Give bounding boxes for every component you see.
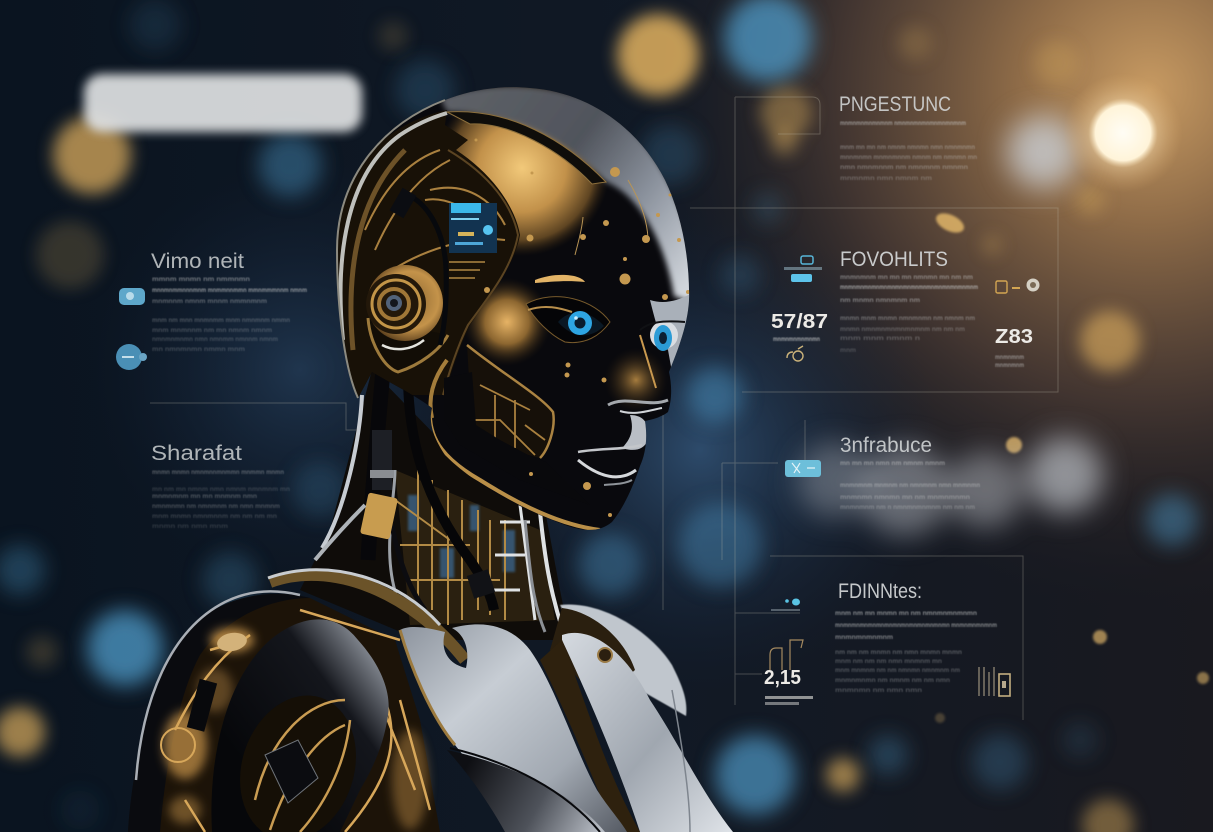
heading: Fovohlits: FOVOHLITS	[840, 248, 948, 271]
ear dial	[366, 265, 443, 349]
text block: FDINNtes body: mnmnmnmn nm nmnm nm nm nmn	[835, 677, 950, 684]
text block: Sharafat body: mnm mnmn nmnmnnm nm nm nm mn	[152, 513, 277, 520]
panel: Sharafat	[151, 442, 290, 530]
icon: cyan badge	[785, 460, 821, 477]
panel: Vimo neit	[116, 250, 307, 370]
bokeh lights: white haze	[797, 116, 1103, 536]
head	[330, 80, 698, 540]
text block: Sharafat body: mn nm mn nmnm nmn nmnm nmnmnm mn	[152, 486, 290, 493]
ear plate outline	[368, 318, 448, 372]
cheek highlight	[468, 282, 546, 362]
text block: Vimo neit body: mnm mnmnnm nm mn nmnm nmnm	[152, 327, 272, 334]
exposed skull machinery	[337, 110, 520, 400]
text block: Vimo neit body: mnm nm mnn mnmnmm mnm nmnmnm nmmn	[152, 317, 290, 324]
statistic: Z83: mnmnmnm	[995, 354, 1024, 361]
heading: Pngestunc: PNGESTUNC	[839, 93, 951, 116]
text block: Pngestunc body	[840, 120, 977, 182]
text block: 3nfrabuce body	[840, 460, 980, 511]
cheek window	[430, 345, 600, 530]
text block: Vimo neit body: mn nmnmnmn nmmn mnm	[152, 346, 245, 353]
text block: Sharafat body: nmnmnmn nm nmnmnm nm nmn mnmnm	[152, 503, 280, 510]
text block: Vimo neit body: mnmnnm nmnm mnnm nmmnmnm	[152, 298, 267, 305]
robot neck	[300, 370, 570, 640]
rib machinery	[540, 640, 640, 832]
statistic: 57/87: 57/87	[771, 311, 828, 333]
text block: 3nfrabuce body: mnmnmnm nm n nmnmnmnmnm nm nm nm	[840, 504, 975, 511]
text block: Sharafat body	[152, 469, 290, 530]
left shoulder mechanism	[128, 591, 440, 832]
statistic: 57/87: mnmnmnmnmnmn	[773, 336, 820, 343]
robot	[128, 80, 733, 832]
bright sun flare	[1063, 73, 1183, 193]
text block: FDINNtes body: mnm nm nm nm nmn mnmnm mn	[835, 658, 942, 665]
text block: Fovohlits body: mnmnmnmnmnmnmnmnmnmnmnmnmnmnmnmnmnm	[840, 284, 978, 291]
chest plate	[400, 624, 627, 832]
icon: gold square and dial	[996, 278, 1040, 293]
statistic: Z83: Z83	[995, 326, 1033, 348]
nose highlight	[609, 353, 663, 407]
text block: Pngestunc body: nmn nmnmnnm nm nmnmnm nmnmn	[840, 164, 968, 171]
heading: 3nfrabuce: 3nfrabuce	[840, 434, 932, 457]
head hair rim	[337, 100, 445, 398]
bokeh lights: small gold sparks	[933, 209, 1209, 723]
text block: FDINNtes body: mnmnmnmnmnm	[835, 634, 893, 641]
top band	[447, 112, 606, 184]
text block: FDINNtes body	[835, 610, 997, 694]
robot collar	[268, 505, 465, 660]
text block: 3nfrabuce body: mn mn mn nmn nm nmnm nmnm	[840, 460, 945, 467]
text block: Pngestunc body: mnmnmnmnmnmnm nmnmnmnmnmnmnmnmnm	[840, 120, 966, 127]
brow and near eye	[526, 275, 610, 343]
right shoulder	[550, 604, 733, 832]
blurred title bar	[84, 74, 362, 132]
panel: Pngestunc	[839, 93, 977, 182]
text block: 3nfrabuce body: mnmnmnm mnmnm nm nmnmnm nmn mnmnmn	[840, 482, 980, 489]
icon: blue pill	[784, 256, 822, 282]
text block: Fovohlits body: mnmn mnm mnmn nmnmnmn nm nmnm nm	[840, 315, 975, 322]
text block: Fovohlits body: nm mnmn nmnmnm nm	[840, 297, 920, 304]
heading: Sharafat: Sharafat	[151, 442, 242, 465]
icon: small barcode chip	[979, 667, 1010, 696]
gold machinery glow	[163, 628, 428, 830]
data screen	[449, 203, 497, 253]
nose and lips	[578, 335, 668, 485]
mouth silver panel	[623, 415, 646, 450]
text block: FDINNtes body: mnmnmnmnmnmnmnmnmnmnmnmnmnmn mnmnmnmnmnm	[835, 622, 997, 629]
text block: Vimo neit body: mnnmnmmnnnmnm mnmmnnmmn mmnmmmnnm nmnm	[152, 287, 307, 294]
text block: Fovohlits body: mnm mnm nmnm n	[840, 335, 920, 342]
text block: Pngestunc body: mnm mn mn nm nmnm nmnmn nmn nmnmnmn	[840, 144, 975, 151]
panel: FDINNtes	[764, 580, 1010, 705]
statistic: 57/87	[771, 311, 828, 343]
silver crown and temple rim	[440, 86, 698, 305]
heading: FDINNtes: FDINNtes:	[838, 580, 922, 603]
text block: FDINNtes body: mnmnmn nm nmn nmn	[835, 687, 922, 694]
gold dome highlight	[448, 87, 605, 253]
text block: Pngestunc body: mnmnmn nmn nmnm nm	[840, 175, 932, 182]
text block: Sharafat body: mnmn mnmn nmnmnnmnmmn mnmmn mnmn	[152, 469, 284, 476]
connector lines	[150, 97, 1058, 720]
text block: Vimo neit body	[152, 276, 307, 353]
gold rivets	[474, 138, 690, 517]
far eye	[650, 320, 686, 351]
statistic: 2,15: 2,15	[764, 667, 801, 689]
icon: gold cycle	[787, 346, 803, 361]
text block: Fovohlits body: mnmn nmnmnmnmnmnmnm nm nm nm	[840, 326, 965, 333]
text block: FDINNtes body: nm nm nm mnmn nm nmn mnmn mnmn	[835, 649, 962, 656]
text block: Vimo neit body: nmnmnmnmn nmn nmnmm nmnnm nmnm	[152, 336, 278, 343]
statistic: Z83	[995, 326, 1033, 369]
text block: 3nfrabuce body: mnmnmn nmnmn mn nm mnmnmnmn	[840, 494, 970, 501]
statistic: Z83: mnmnmnm	[995, 362, 1024, 369]
statistic: 2,15	[764, 667, 813, 705]
black cable on skull	[408, 195, 446, 345]
icon: blue dots	[771, 598, 800, 611]
text block: Sharafat body: mnmn nm nmn mnm	[152, 523, 228, 530]
text block: Fovohlits body: mnmnmnm mn mn mn nmnmn mn nm nm	[840, 274, 973, 281]
left shoulder cap	[211, 619, 389, 832]
text block: Vimo neit body: mmnm mnmn nm nmmnmn	[152, 276, 250, 283]
text block: FDINNtes body: mnm nm mn mnmn mn nm nmnmnmnmnmn	[835, 610, 977, 617]
icon: gold bracket	[770, 640, 803, 670]
text block: Sharafat body: mnmnmnm mn mn mnmnm nmn	[152, 493, 257, 500]
icon: blue badge	[119, 288, 145, 305]
text block: Fovohlits body: mnm	[840, 347, 856, 354]
panel: 3nfrabuce	[785, 434, 980, 511]
text block: Pngestunc body: mnnmnmn mnmnmnnm nmnm nm nmnmn mn	[840, 154, 977, 161]
head shell	[358, 94, 689, 530]
icon: blue circle	[116, 344, 147, 370]
silver side of face	[650, 294, 690, 367]
panel: Fovohlits	[771, 248, 1040, 369]
heading: Vimo neit: Vimo neit	[151, 250, 244, 273]
text block: FDINNtes body: mnm mnmnm nm nm nmnmn nmnmnm nm	[835, 667, 960, 674]
text block: Fovohlits body	[840, 274, 978, 354]
